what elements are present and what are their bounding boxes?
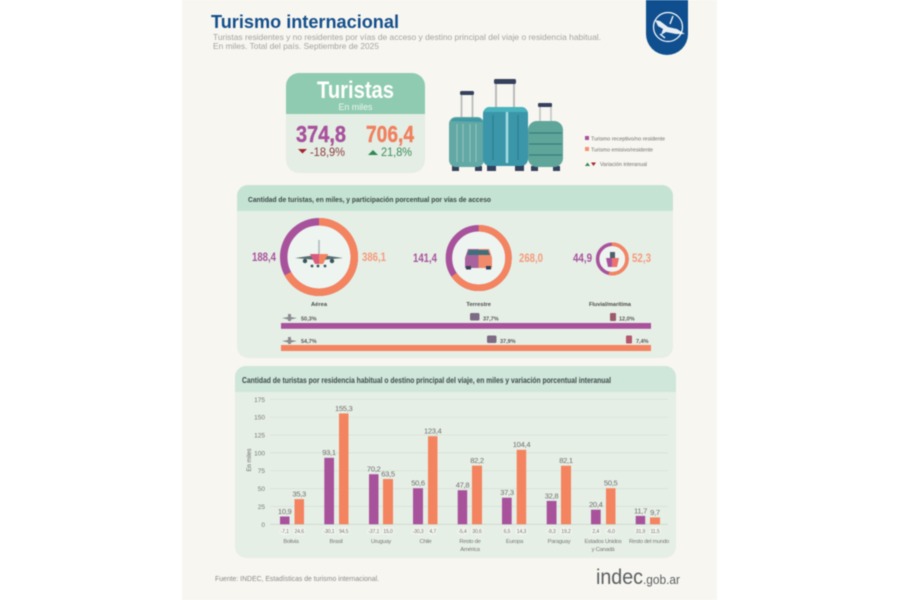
icon: ship bbox=[606, 252, 619, 267]
share label: 7,4%: 7,4% bbox=[636, 339, 649, 345]
heading: Turistas: Turistas bbox=[317, 77, 394, 104]
y axis labels: 75 bbox=[258, 468, 265, 475]
subtitle bbox=[213, 32, 601, 51]
donut: Terrestre bbox=[449, 228, 509, 288]
label: Fluvial/marítima: Fluvial/marítima bbox=[589, 302, 632, 308]
group: Resto del mundo bbox=[629, 506, 669, 545]
value: aérea receptive: 188,4 bbox=[252, 250, 276, 264]
group: Brasil: 94,5 bbox=[339, 529, 349, 535]
group: Bolivia: 24,6 bbox=[294, 529, 304, 535]
group: Estados Unidos y Canadá: 20,4 bbox=[589, 500, 603, 509]
share bar: receptive bbox=[281, 313, 651, 329]
group: Chile: -30,3 bbox=[412, 529, 424, 535]
share icon: ship outbound bbox=[626, 336, 632, 344]
icon: INDEC tourism badge bbox=[646, 0, 688, 55]
donut: Aérea bbox=[284, 222, 354, 292]
group: Paraguay: 82,1 bbox=[559, 456, 573, 465]
group: Brasil: 155,3 bbox=[335, 404, 353, 413]
share label: 54,7%: 54,7% bbox=[301, 339, 317, 345]
icon: airplane bbox=[295, 240, 343, 267]
number: receptive tourists: 374,8 bbox=[296, 121, 346, 147]
donut: Fluvial/marítima bbox=[598, 244, 627, 274]
group: Estados Unidos y Canadá: 2,4 bbox=[592, 529, 599, 535]
group: Bolivia: Bolivia bbox=[283, 539, 300, 545]
group: Resto de América: 82,2 bbox=[470, 456, 484, 465]
subtitle: Turistas residentes y no residentes por vías de acceso y destino principal del viaje o residencia habitual. bbox=[213, 32, 601, 42]
y axis labels: 100 bbox=[254, 450, 265, 458]
panel: residence or destination bbox=[235, 366, 676, 558]
group: Chile: Chile bbox=[420, 539, 432, 545]
group: Estados Unidos y Canadá: 50,5 bbox=[604, 479, 618, 488]
group: Resto de América: 30,6 bbox=[472, 529, 482, 535]
group: Estados Unidos y Canadá: y Canadá bbox=[592, 547, 615, 553]
subheading: En miles: En miles bbox=[338, 102, 373, 112]
group: Chile: 50,6 bbox=[411, 479, 425, 488]
card header bbox=[286, 73, 425, 114]
group: Brasil bbox=[322, 404, 353, 545]
legend: receptive tourism: Turismo receptivo/no residente bbox=[591, 136, 665, 142]
group: Uruguay: 63,5 bbox=[381, 469, 395, 478]
group: Paraguay: Paraguay bbox=[548, 539, 571, 545]
y axis labels: 175 bbox=[254, 397, 265, 404]
variation: down: -18,9% bbox=[310, 147, 345, 159]
group: Bolivia bbox=[278, 490, 306, 545]
group: Paraguay: -9,3 bbox=[547, 529, 556, 535]
group: Europa: 6,5 bbox=[504, 529, 511, 535]
card: Turistas summary bbox=[286, 73, 425, 173]
share bar: outbound bbox=[281, 336, 651, 351]
y axis title: En miles bbox=[247, 448, 253, 472]
group: Bolivia: 10,9 bbox=[278, 507, 292, 516]
value: terrestre receptive: 141,4 bbox=[413, 251, 437, 265]
group: Bolivia: -7,1 bbox=[281, 529, 289, 535]
group: Europa: 37,3 bbox=[500, 488, 514, 497]
value: terrestre outbound: 268,0 bbox=[519, 251, 543, 265]
share icon: car receptive bbox=[470, 313, 480, 320]
group: Europa bbox=[500, 440, 530, 545]
group: Resto del mundo: 11,7 bbox=[634, 506, 647, 515]
panel: access routes bbox=[237, 185, 673, 358]
group: Estados Unidos y Canadá: -6,0 bbox=[607, 529, 615, 535]
value: aérea outbound: 386,1 bbox=[362, 250, 386, 264]
group: Estados Unidos y Canadá bbox=[584, 479, 622, 553]
group: Uruguay bbox=[367, 465, 395, 545]
group: Chile: 123,4 bbox=[424, 427, 442, 436]
share icon: plane outbound bbox=[282, 337, 297, 344]
group: Uruguay: -37,1 bbox=[368, 529, 379, 535]
bar chart bbox=[247, 397, 669, 553]
y axis labels: 50 bbox=[258, 486, 265, 493]
group: Paraguay: 32,8 bbox=[545, 491, 558, 500]
panel header bbox=[235, 366, 676, 392]
group: Resto del mundo: 9,7 bbox=[650, 508, 660, 517]
logo: indec.gob.ar: .gob.ar bbox=[643, 573, 680, 587]
y axis labels: 0 bbox=[261, 522, 265, 529]
group: Europa: 104,4 bbox=[513, 440, 530, 449]
share icon: car outbound bbox=[487, 336, 496, 343]
group: Europa: Europa bbox=[506, 539, 524, 545]
right suitcase bbox=[528, 103, 563, 171]
group: Chile bbox=[411, 427, 442, 545]
group: Uruguay: 70,2 bbox=[367, 465, 381, 474]
logo: indec.gob.ar bbox=[596, 566, 680, 589]
group: Resto de América: 47,8 bbox=[456, 481, 469, 490]
middle suitcase bbox=[483, 79, 528, 171]
group: Resto de América bbox=[456, 456, 484, 553]
y axis labels: 125 bbox=[254, 432, 265, 440]
number: outbound tourists: 706,4 bbox=[366, 121, 414, 147]
label: Terrestre: Terrestre bbox=[466, 302, 492, 308]
share icon: plane receptive bbox=[282, 314, 297, 321]
share label: 12,0%: 12,0% bbox=[619, 316, 635, 322]
title: Turismo internacional bbox=[211, 11, 399, 32]
legend: outbound tourism: Turismo emisivo/residente bbox=[591, 148, 653, 154]
group: Uruguay: Uruguay bbox=[371, 539, 391, 545]
variation: up: 21,8% bbox=[381, 147, 412, 159]
group: Uruguay: 15,0 bbox=[383, 529, 393, 535]
value: fluvial outbound: 52,3 bbox=[632, 251, 651, 265]
legend: year-over-year variation: Variación interanual bbox=[600, 162, 647, 168]
icon: car bbox=[465, 249, 492, 270]
group: Resto de América: América bbox=[460, 547, 481, 553]
legend bbox=[585, 136, 665, 168]
group: Paraguay bbox=[545, 456, 573, 545]
group: Resto de América: -5,4 bbox=[458, 529, 467, 535]
group: Chile: 4,7 bbox=[429, 529, 436, 535]
label: Aérea: Aérea bbox=[311, 302, 328, 308]
y axis labels: 25 bbox=[258, 504, 265, 511]
heading: residence or destination: Cantidad de turistas por residencia habitual o destino principal del viaje, en miles y variación porcentual interanual bbox=[242, 376, 611, 385]
y axis labels bbox=[254, 397, 265, 529]
source note: Fuente: INDEC, Estadísticas de turismo internacional. bbox=[215, 574, 379, 583]
group: Europa: 14,3 bbox=[517, 529, 527, 535]
illustration: suitcases bbox=[449, 79, 563, 171]
page background bbox=[182, 0, 717, 600]
group: Brasil: Brasil bbox=[330, 539, 342, 545]
group: Brasil: -30,1 bbox=[323, 529, 335, 535]
share label: 50,3%: 50,3% bbox=[301, 316, 317, 322]
group: Brasil: 93,1 bbox=[322, 448, 336, 457]
share label: 37,7%: 37,7% bbox=[483, 316, 499, 322]
group: Paraguay: 19,2 bbox=[561, 529, 571, 535]
group: Bolivia: 35,3 bbox=[292, 490, 306, 498]
group: Resto del mundo: 31,9 bbox=[636, 529, 646, 535]
group: Resto del mundo: Resto del mundo bbox=[629, 539, 669, 545]
logo: indec.gob.ar: indec bbox=[596, 566, 643, 589]
y axis labels: 150 bbox=[254, 414, 265, 422]
value: fluvial receptive: 44,9 bbox=[573, 251, 592, 265]
panel header bbox=[237, 185, 673, 211]
group: Estados Unidos y Canadá: Estados Unidos bbox=[584, 539, 622, 545]
share label: 37,9%: 37,9% bbox=[500, 339, 516, 345]
group: Resto de América: Resto de bbox=[459, 539, 481, 545]
subtitle: En miles. Total del país. Septiembre de 2025 bbox=[213, 41, 379, 51]
group: Resto del mundo: 11,5 bbox=[650, 529, 660, 535]
heading: access routes: Cantidad de turistas, en miles, y participación porcentual por vías de acceso bbox=[248, 195, 491, 204]
left suitcase bbox=[449, 91, 484, 171]
share icon: ship receptive bbox=[610, 313, 616, 321]
